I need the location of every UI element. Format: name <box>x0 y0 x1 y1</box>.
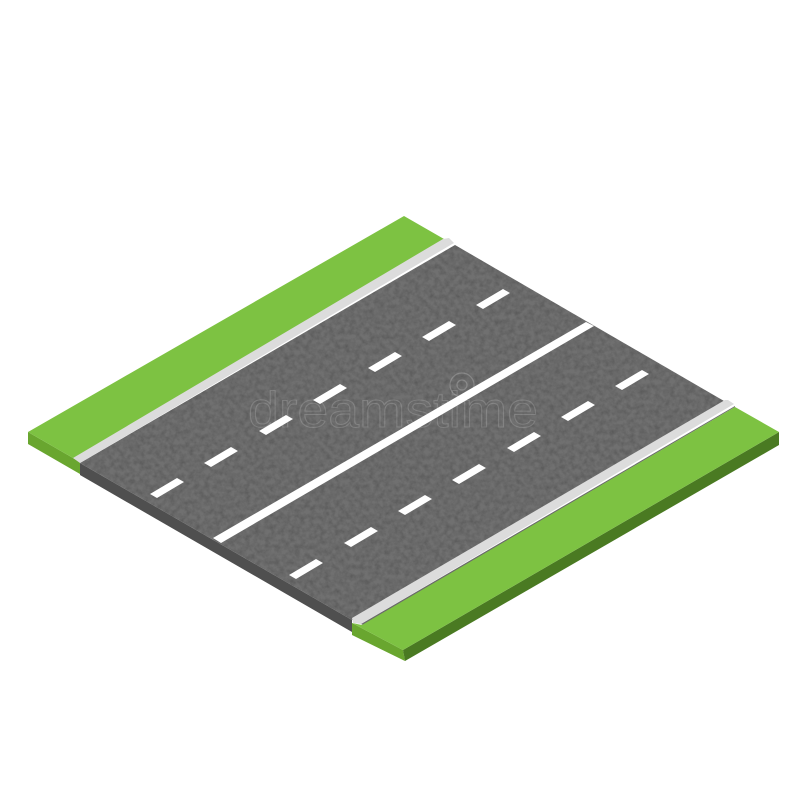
asphalt surface <box>80 245 724 620</box>
road base side <box>80 463 352 632</box>
lower lane dashes <box>289 370 649 579</box>
upper lane dashes <box>150 289 510 498</box>
upper kerb <box>73 238 454 463</box>
watermark logo <box>450 373 474 397</box>
right green verge <box>352 407 779 661</box>
centre line <box>213 322 594 543</box>
watermark text: dreamstime <box>248 382 538 438</box>
left green verge <box>28 216 444 474</box>
lower kerb <box>352 400 735 625</box>
